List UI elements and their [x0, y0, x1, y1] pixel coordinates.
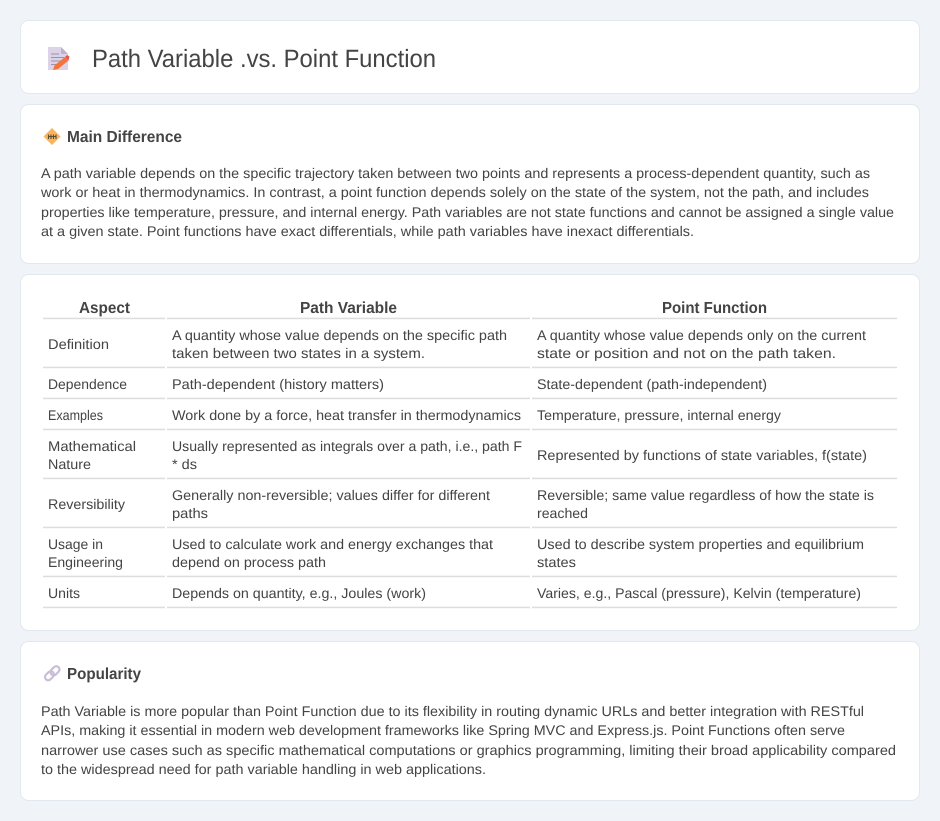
row: usage in engineering: Engineering — [48, 554, 123, 570]
text block: main difference body: at a given state. Point functions have exact differentials, while path variables have inexact differentials. — [41, 223, 694, 239]
text block: main difference body — [40, 165, 894, 239]
row: definition: Definition — [48, 336, 109, 352]
icon: warning diamond — [44, 128, 60, 145]
title: Path Variable .vs. Point Function — [92, 45, 436, 73]
row: reversibility: reached — [537, 505, 588, 521]
row: reversibility: Reversibility — [48, 496, 125, 512]
row: mathematical nature: Usually represented as integrals over a path, i.e., path F — [172, 438, 522, 454]
row: definition: A quantity whose value depends on the specific path — [172, 327, 507, 343]
text block: main difference body: work or heat in thermodynamics. In contrast, a point function depends solely on the state of the system, not the path, and includes — [40, 184, 869, 200]
text block: popularity body: narrower use cases such as specific mathematical computations or graphics programming, limiting their broad applicability compared — [41, 742, 896, 758]
row: definition: state or position and not on the path taken. — [537, 345, 836, 361]
row: usage in engineering: Usage in — [48, 536, 103, 552]
row: usage in engineering — [48, 536, 864, 570]
text block: popularity body: to the widespread need for path variable handling in web applications. — [41, 761, 486, 777]
heading: popularity: Popularity — [67, 666, 141, 683]
row: mathematical nature: * ds — [172, 456, 197, 472]
row: mathematical nature — [48, 438, 867, 472]
text block: popularity body — [41, 703, 896, 777]
table header — [79, 300, 767, 317]
panel: main difference — [20, 104, 920, 264]
row: units — [48, 585, 861, 601]
text block: main difference body: A path variable depends on the specific trajectory taken between two points and represents a process-dependent quantity, such as — [41, 165, 870, 181]
row: definition: A quantity whose value depends only on the current — [537, 327, 866, 343]
row: reversibility: Generally non-reversible; values differ for different — [172, 487, 490, 503]
panel: comparison table — [20, 274, 920, 630]
row: mathematical nature: Mathematical — [48, 438, 136, 454]
row: dependence: Path-dependent (history matters) — [172, 376, 384, 392]
row: dependence — [48, 376, 767, 392]
row: units: Varies, e.g., Pascal (pressure), Kelvin (temperature) — [537, 585, 861, 601]
row: usage in engineering: Used to describe system properties and equilibrium — [537, 536, 864, 552]
row: mathematical nature: Nature — [48, 456, 91, 472]
text block: popularity body: Path Variable is more popular than Point Function due to its flexibility in routing dynamic URLs and better integration with RESTful — [41, 703, 864, 719]
row: usage in engineering: states — [537, 554, 576, 570]
heading: main difference: Main Difference — [67, 129, 182, 146]
text block: popularity body: APIs, making it essential in modern web development frameworks like Spring MVC and Express.js. Point Functions often serve — [41, 722, 845, 738]
row: reversibility: Reversible; same value regardless of how the state is — [537, 487, 874, 503]
panel: popularity — [20, 642, 920, 800]
row: usage in engineering: depend on process path — [172, 554, 326, 570]
text block: main difference body: properties like temperature, pressure, and internal energy. Path variables are not state functions and cannot be assigned a single value — [41, 204, 894, 220]
row: dependence: Dependence — [48, 376, 127, 392]
row: units: Units — [48, 585, 80, 601]
row: usage in engineering: Used to calculate work and energy exchanges that — [172, 536, 493, 552]
row: definition — [48, 327, 866, 361]
panel: title card — [20, 20, 920, 94]
row: units: Depends on quantity, e.g., Joules (work) — [172, 585, 426, 601]
row: examples: Work done by a force, heat transfer in thermodynamics — [172, 407, 521, 423]
row: definition: taken between two states in a system. — [172, 345, 425, 361]
row: dependence: State-dependent (path-independent) — [537, 376, 767, 392]
row: reversibility — [48, 487, 874, 521]
row: examples: Temperature, pressure, internal energy — [537, 407, 781, 423]
row: mathematical nature: Represented by functions of state variables, f(state) — [537, 447, 867, 463]
table header: Aspect — [79, 300, 131, 317]
row: examples: Examples — [48, 407, 103, 423]
row: reversibility: paths — [172, 505, 208, 521]
table header: Point Function — [662, 300, 767, 317]
table header: Path Variable — [300, 300, 397, 317]
row: examples — [48, 407, 781, 423]
icon: chain link — [44, 665, 61, 682]
icon: document with pencil — [48, 47, 70, 70]
